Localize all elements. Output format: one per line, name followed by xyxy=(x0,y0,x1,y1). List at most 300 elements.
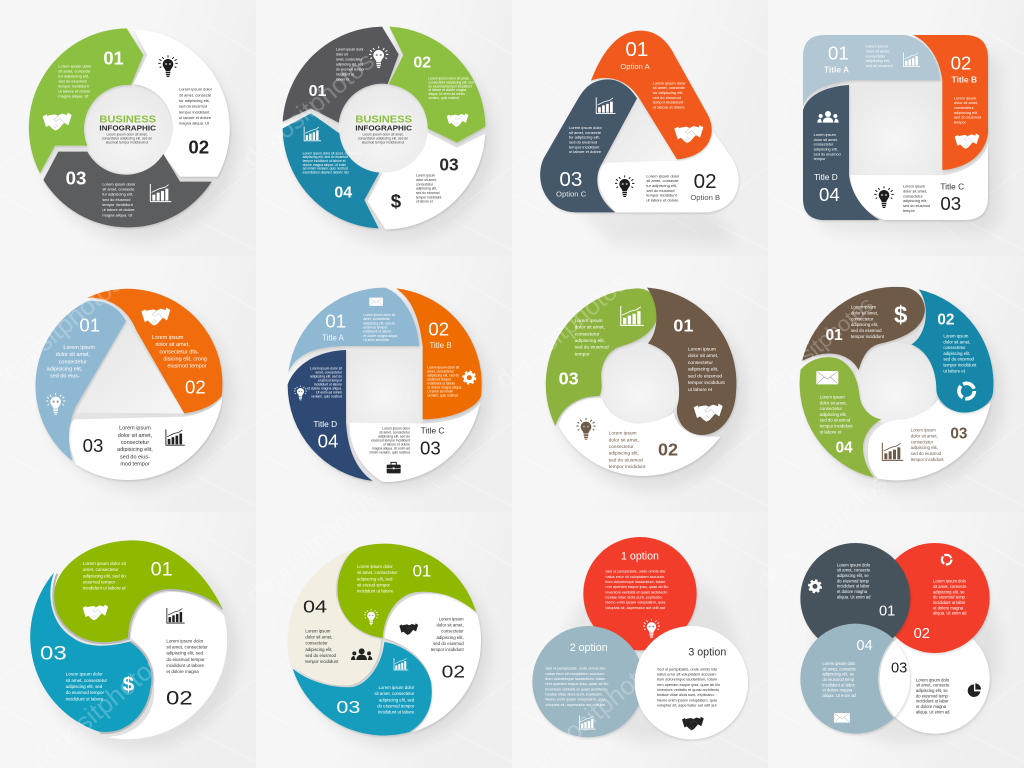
segment 02 white: adipiscing elit, xyxy=(609,451,639,457)
panel: four-part swirl circle xyxy=(288,544,490,746)
segment 01 dark grey: incididunt ut xyxy=(336,73,354,77)
segment 03 white: Lorem ipsum xyxy=(119,426,151,432)
segment 03 green: Lorem ipsum xyxy=(575,318,603,324)
segment title B orange: et dolore magna aliqua. xyxy=(427,386,462,390)
segment 02 green: veniam, quis nostrud xyxy=(428,96,459,100)
circle 3 option white: tium doloremque laudantium, totam xyxy=(657,678,717,682)
circle 04 grey blue: Lorem ipsum dolo xyxy=(822,661,856,666)
circle 03 white: et dolore magna xyxy=(916,704,947,709)
segment 02 white: do eiusmod tempor xyxy=(166,657,205,662)
segment option C dark blue: 03 xyxy=(559,168,582,191)
segment 02 white xyxy=(384,593,481,732)
segment title D dark blue: sed do eiusmod xyxy=(814,152,841,156)
segment 03 blue: $ xyxy=(123,673,135,696)
segment title D dark blue: adipiscing elit, xyxy=(814,147,838,151)
segment 02 blue: tempor incididunt xyxy=(943,362,977,367)
segment title C white: eiusmod tempor incididunt xyxy=(371,438,410,442)
circle 03 white: adipiscing elit, se xyxy=(916,688,948,693)
segment 03 grey: sed do eiusmod xyxy=(102,197,130,202)
circle 04 grey blue: incididunt ut labor xyxy=(822,682,856,687)
segment 02 blue: adipiscing elit, xyxy=(943,351,971,356)
circle 1 option red: tium doloremque laudantium, totam xyxy=(605,580,665,584)
watermark text overlay: depositphotos xyxy=(240,483,383,610)
segment 02 white: Lorem ipsum dolor xyxy=(179,87,213,92)
segment title D dark blue: Lorem ipsum xyxy=(814,133,836,137)
centre title: BUSINESS xyxy=(355,115,413,126)
segment 01 brown: sed do eiusmod xyxy=(851,328,882,333)
circle 01 dark grey: sit amet, consecte xyxy=(837,568,871,573)
segment 04 green: 04 xyxy=(836,440,853,457)
segment title C white xyxy=(850,143,988,220)
segment title B orange xyxy=(913,35,988,170)
segment 04 cream: dolor sit amet, xyxy=(305,634,333,639)
circle 01 dark grey: 01 xyxy=(879,603,895,619)
circle 3 option white: 3 option xyxy=(688,647,726,659)
circle 03 white: Lorem ipsum dolo xyxy=(916,677,950,682)
segment 01 dark grey: labore et xyxy=(336,78,349,82)
segment 01 green: 01 xyxy=(151,559,173,580)
segment title B orange: adipiscing elit, sed do xyxy=(427,374,459,378)
circle 1 option red: Nemo enim ipsam voluptatem, quia xyxy=(605,601,666,605)
segment title D dark blue: Title D xyxy=(814,172,838,182)
segment 04 green: dolor sit amet, xyxy=(820,400,847,405)
segment option C dark blue: tempor incididunt xyxy=(569,144,600,149)
segment 02 white: sed do eiusmod xyxy=(179,104,207,109)
segment title B orange: 02 xyxy=(428,318,449,339)
circle 3 option white: natus error sit voluptatem accusan- xyxy=(657,672,718,676)
segment 02 white: 02 xyxy=(166,689,193,710)
segment 03 white: sed do eiusmod xyxy=(416,191,440,195)
segment 03 green: 03 xyxy=(559,368,579,388)
segment 02 white: dolor sit amet, xyxy=(436,622,464,627)
circle 02 red: aliqua. Ut enim ad xyxy=(933,611,967,616)
circle 1 option red: natus error sit voluptatem accusan- xyxy=(605,575,666,579)
segment 02 green: aliqua. Ut enim ad minim xyxy=(428,92,465,96)
centre title: consectetur adipiscing elit, sed do xyxy=(358,136,408,140)
segment option A orange: sed do eiusmod xyxy=(653,95,681,100)
segment option C dark blue: sit amet, consecte xyxy=(569,130,602,135)
segment 02 white: sit amet, consectetur xyxy=(166,644,208,649)
segment title A light blue: Lorem ipsum xyxy=(866,45,888,49)
segment 01 green: incididunt ut labore et xyxy=(83,586,126,591)
segment title B orange xyxy=(396,288,482,419)
centre title: BUSINESS xyxy=(99,115,157,126)
segment title A light blue: Ut enim ad minim xyxy=(363,338,389,342)
segment option B white: 02 xyxy=(694,170,717,193)
segment 01 brown xyxy=(647,288,736,435)
circle 03 white xyxy=(880,624,990,734)
segment 02 white: Lorem ipsum xyxy=(439,616,464,621)
segment 02 white: consectetur xyxy=(609,444,634,450)
segment option A orange: 01 xyxy=(625,38,648,61)
segment title D navy: veniam, quis nostrud xyxy=(311,394,342,398)
segment option B white: tempor incididunt xyxy=(646,193,678,198)
circle 04 grey blue: adipiscing elit, se xyxy=(822,672,855,677)
segment 01 green xyxy=(337,544,476,638)
segment 04 green: sed do eiusmod xyxy=(820,418,851,423)
segment 02 white: adipiscing elit, xyxy=(436,635,464,640)
segment 02 white: ut labore et dolore xyxy=(179,115,212,120)
segment 02 white: sed do eiusmod xyxy=(609,457,643,463)
segment 03 white: adipisicing elit, xyxy=(117,447,153,453)
circle 04 grey blue: sit amet, consecte xyxy=(822,666,857,671)
segment title C white: dolor sit amet, xyxy=(903,189,927,193)
segment 01 dark grey: Lorem ipsum dolor xyxy=(336,48,364,52)
segment 03 blue: adipiscing elit, sed xyxy=(379,697,415,702)
segment title D navy: 04 xyxy=(318,431,338,452)
segment 02 white: 02 xyxy=(188,136,209,157)
segment 03 white xyxy=(69,396,223,480)
segment 01 brown: Lorem ipsum xyxy=(688,346,716,352)
segment title D navy: Lorem ipsum dolor sit xyxy=(310,366,342,370)
segment 03 green: tempor xyxy=(575,351,590,357)
segment 03 green: sed do eiusmod xyxy=(575,345,609,351)
segment 03 white: dolor sit amet, xyxy=(118,433,153,439)
segment title D dark blue: tempor xyxy=(814,157,826,161)
circle 01 dark grey: et dolore magna xyxy=(837,589,868,594)
segment title A light blue: eiusmod tempor xyxy=(363,325,388,329)
segment 01 brown xyxy=(802,287,925,370)
centre title: eiusmod tempor incididunt ut xyxy=(106,140,148,144)
segment 01 dark grey: 01 xyxy=(309,83,327,100)
circle 01 dark grey: adipiscing elit, se xyxy=(837,573,869,578)
segment 02 white: incididunt ut labore xyxy=(166,663,204,668)
segment 01 green: ut labore et dolore xyxy=(58,89,91,94)
segment title D navy: amet, consectetur xyxy=(316,370,343,374)
segment 02 green: consectetur adipiscing elit, sed xyxy=(428,80,474,84)
circle 1 option red xyxy=(583,537,697,650)
segment 01 green: eiusmod tempor xyxy=(83,579,116,584)
circle 01 dark grey: aliqua. Ut enim ad xyxy=(837,594,871,599)
segment 02 white: 02 xyxy=(442,662,465,682)
segment 03 white: consectetur xyxy=(416,182,434,186)
segment 01 light blue: dolor sit amet, xyxy=(56,352,91,358)
segment 04 cream: consectetur xyxy=(305,641,328,646)
segment 02 white: Lorem ipsum xyxy=(609,431,637,437)
segment title A light blue: adipiscing elit, sed do xyxy=(363,321,395,325)
segment 02 orange: Lorem ipsum xyxy=(152,335,184,341)
segment 02 white: tempor incididunt xyxy=(609,464,646,470)
circle 2 option grey blue: voluptas sit, aspernatur aut odit aut xyxy=(545,703,606,707)
segment 04 cream: Lorem ipsum xyxy=(305,628,331,633)
segment 03 white: 03 xyxy=(950,425,967,442)
segment 02 white xyxy=(107,592,227,739)
segment 01 dark grey: amet, consectetur xyxy=(336,58,363,62)
panel: circle with square hole and four titles xyxy=(288,288,491,491)
circle 01 dark grey: Lorem ipsum dolo xyxy=(837,562,871,567)
circle 03 white: incididunt ut labor xyxy=(916,699,949,704)
segment option C dark blue: ut labore et dolore xyxy=(569,149,602,154)
segment title A light blue: adipiscing elit, xyxy=(866,59,890,63)
panel: three-part swirl circle xyxy=(30,540,238,750)
segment option C dark blue: sed do eiusmod xyxy=(569,139,597,144)
segment 02 white: tur adipiscing elit, xyxy=(179,98,210,103)
centre title: Lorem ipsum dolor sit amet, xyxy=(106,133,148,137)
segment 02 orange: consectetur dfa- xyxy=(159,349,199,355)
segment option A orange: sit amet, consecte xyxy=(653,85,686,90)
segment 03 blue: sit amet, consectetur xyxy=(66,678,108,683)
segment 03 blue: Lorem ipsum dolor xyxy=(66,672,103,677)
circle 3 option white: Sed ut perspiciatis, unde omnis iste xyxy=(657,667,717,671)
circle 04 grey blue xyxy=(800,624,910,734)
segment title B orange: tempor xyxy=(954,120,967,124)
segment option A orange: ut labore et dolore xyxy=(653,104,686,109)
panel: rounded triangle with three options xyxy=(540,31,739,243)
segment 04 cream: tempor incididunt xyxy=(305,659,339,664)
segment 02 blue: dolor sit amet, xyxy=(943,339,971,344)
segment 02 orange: 02 xyxy=(185,376,206,397)
segment title C white: adipiscing elit, sed do xyxy=(378,434,410,438)
segment 02 blue: sed do eiusmod xyxy=(943,357,974,362)
segment 01 green: sit amet, consecte xyxy=(58,69,91,74)
segment title D dark blue xyxy=(803,85,880,220)
segment 03 white: sed do eiusmod xyxy=(911,451,942,456)
segment option C dark blue: tur adipiscing elit, xyxy=(569,135,600,140)
segment 01 dark grey: dolor sit xyxy=(336,53,348,57)
segment 03 blue: do eiusmod tempor xyxy=(377,703,415,708)
circle 04 grey blue: et dolore magna xyxy=(822,688,853,693)
circle 04 grey blue: aliqua. Ut enim ad xyxy=(822,693,857,698)
segment 03 grey: sit amet, consecte xyxy=(102,186,135,191)
segment 03 green: consectetur xyxy=(575,331,600,337)
segment 04 cream: adipiscing elit, xyxy=(305,647,333,652)
segment 01 brown: ut labore et xyxy=(688,387,713,393)
segment title D navy: adipiscing elit, sed do xyxy=(310,374,342,378)
watermark text overlay: depositphotos xyxy=(237,46,380,173)
segment 03 white: adipiscing elit, xyxy=(416,187,437,191)
segment title A light blue: Lorem ipsum dolor sit xyxy=(363,313,395,317)
segment 01 green: 01 xyxy=(413,562,431,581)
centre title xyxy=(99,115,157,144)
circle 04 grey blue: 04 xyxy=(856,638,873,654)
segment 01 brown: dolor sit amet, xyxy=(688,353,718,359)
segment title C white: Title C xyxy=(940,181,964,191)
segment option B white: tur adipiscing elit, xyxy=(646,183,677,188)
segment 02 white: Lorem ipsum dolor xyxy=(166,638,204,643)
watermark text overlay: depositphotos xyxy=(490,268,633,395)
segment title D dark blue: 04 xyxy=(819,184,840,205)
panel: three curved segments ring brown green xyxy=(546,288,746,490)
centre title: Lorem ipsum dolor sit amet, xyxy=(362,133,404,137)
segment 03 green: dolor sit amet, xyxy=(575,325,605,331)
circle 2 option grey blue: rem aperiam eaque ipsa, quae ab illo xyxy=(545,682,608,686)
white overlap over grey blue with number 03 xyxy=(880,641,910,717)
segment 01 green: adipiscing elit, sed xyxy=(357,576,393,581)
segment 04 cream xyxy=(288,549,381,686)
segment 01 green: 01 xyxy=(103,47,124,68)
segment 04 cream: sed do eiusmod xyxy=(305,653,336,658)
segment 01 green: tur adipiscing elit, xyxy=(58,74,89,79)
segment 01 brown: consectetur xyxy=(851,316,874,321)
segment title C white xyxy=(349,403,480,482)
panel: three overlapping circles xyxy=(532,537,748,742)
segment 04 green: ut labore et xyxy=(820,429,842,434)
circle 3 option white: inventore veritatis et quasi architecto xyxy=(657,688,719,692)
segment option C dark blue xyxy=(540,79,637,212)
segment 02 blue: 02 xyxy=(937,312,954,329)
segment title D navy: Title D xyxy=(313,419,337,429)
segment 03 blue: incididunt ut labore xyxy=(378,710,415,715)
segment 04 cream: 04 xyxy=(303,597,327,617)
segment title B orange: Title B xyxy=(952,75,977,85)
segment 03 white: 03 xyxy=(83,435,103,456)
segment title B orange: Title B xyxy=(429,341,452,350)
centre title: INFOGRAPHIC xyxy=(355,125,412,132)
segment 04 blue xyxy=(283,113,379,228)
segment option B white: sit amet, consecte xyxy=(646,178,679,183)
segment title B orange: 02 xyxy=(951,52,971,73)
circle 04 grey blue: do eiusmod temp xyxy=(822,677,855,682)
segment 04 blue: exercitation ullamco laboris nisi xyxy=(303,170,349,174)
segment 04 green xyxy=(800,357,881,478)
segment 02 orange xyxy=(87,289,222,413)
circle 02 red: et dolore magna xyxy=(933,605,964,610)
segment title B orange: Lorem ipsum xyxy=(954,96,976,100)
segment 02 orange: disicing elit, crong xyxy=(163,356,207,362)
segment title A light blue xyxy=(288,288,419,373)
segment title A light blue: Title A xyxy=(322,334,345,343)
segment 02 white: et dolore magna xyxy=(166,669,199,674)
segment 01 green xyxy=(29,28,143,173)
segment 04 blue: Lorem ipsum dolor sit amet, consectetur xyxy=(303,151,363,155)
segment 03 white: ut labore et xyxy=(416,200,433,204)
segment 03 grey: Lorem ipsum dolor xyxy=(102,181,136,186)
watermark text overlay: depositphotos xyxy=(750,468,893,595)
segment 01 brown: sed do eiusmod xyxy=(688,373,722,379)
circle 01 dark grey: incididunt ut labor xyxy=(837,584,870,589)
segment 02 blue: consectetur xyxy=(943,345,966,350)
segment 03 white: dolor sit amet, xyxy=(416,178,437,182)
segment 03 blue: sit amet, consectetur xyxy=(374,691,415,696)
segment 01 green: tempor incididunt xyxy=(58,84,90,89)
segment 02 blue: Lorem ipsum xyxy=(943,334,969,339)
centre title: consectetur adipiscing elit, sed do xyxy=(102,136,152,140)
segment title C white: 03 xyxy=(420,437,441,458)
segment title C white: magna aliqua. Ut enim ad xyxy=(372,446,410,450)
segment title C white: tempor xyxy=(903,209,916,213)
segment 01 brown: adipiscing elit, xyxy=(688,367,718,373)
segment 02 green xyxy=(389,27,485,143)
segment 03 white: tempor incididunt xyxy=(911,457,944,462)
segment 04 green: adipiscing elit, xyxy=(820,412,847,417)
segment 01 light blue: adipisicing elit, xyxy=(47,366,83,372)
circle 02 red: do eiusmod temp xyxy=(933,595,966,600)
segment 04 blue: 04 xyxy=(334,184,352,201)
segment 03 white: Lorem ipsum xyxy=(911,428,936,433)
centre title: eiusmod tempor incididunt ut xyxy=(362,140,404,144)
circle 03 white: aliqua. Ut enim ad xyxy=(916,709,950,714)
circle 01 dark grey: do eiusmod temp xyxy=(837,578,870,583)
segment title D dark blue: dolor sit amet, xyxy=(814,138,838,142)
segment option B white: Option B xyxy=(690,193,720,202)
segment title A light blue: incididunt ut labore xyxy=(363,330,391,334)
segment 01 green: Lorem ipsum dolor xyxy=(58,64,92,69)
segment title A light blue: dolor sit amet, xyxy=(866,49,890,53)
segment title B orange: eiusmod tempor xyxy=(427,378,452,382)
segment 03 grey: tur adipiscing elit, xyxy=(102,192,133,197)
segment 04 green: Lorem ipsum xyxy=(820,395,845,400)
segment 02 white: tempor incididunt xyxy=(179,109,210,114)
segment title B orange: incididunt ut labore xyxy=(427,382,455,386)
segment title D dark blue: consectetur xyxy=(814,143,834,147)
segment option A orange: tur adipiscing elit, xyxy=(653,90,683,95)
segment title D navy: et dolore magna aliqua. xyxy=(307,386,342,390)
segment title A light blue: consectetur xyxy=(866,54,886,58)
segment 02 green: ut labore et dolore magna xyxy=(428,88,466,92)
segment 01 green: adipiscing elit, sed do xyxy=(83,573,126,578)
panel: four overlapping circles xyxy=(800,543,1000,744)
segment 01 green: sed do eiusmod xyxy=(58,79,86,84)
segment 04 green: consectetur xyxy=(820,406,843,411)
segment 03 white: consectetur xyxy=(911,439,934,444)
segment 01 brown: consectetur xyxy=(688,360,713,366)
segment 04 blue: ad minim veniam, quis nostrud xyxy=(303,167,348,171)
segment 03 blue: do eiusmod tempor xyxy=(66,690,105,695)
segment 03 blue: incididunt ut labore xyxy=(66,696,104,701)
segment option B white: ut labore et dolore xyxy=(646,197,679,202)
segment 01 light blue: Lorem ipsum xyxy=(63,345,95,351)
circle 03 white: sit amet, consecte xyxy=(916,683,950,688)
segment title C white: minim veniam, quis nostrud xyxy=(369,450,410,454)
segment 03 white: mod tempor xyxy=(120,461,150,467)
segment 03 white: 03 xyxy=(439,155,459,175)
circle 02 red: incididunt ut labor xyxy=(933,600,966,605)
panel: rounded square with four titles xyxy=(803,35,1001,233)
segment option A orange: Option A xyxy=(620,62,651,71)
circle 2 option grey blue: Nemo enim ipsam voluptatem, quia xyxy=(545,698,606,702)
segment 03 blue: adipiscing elit, sed xyxy=(66,684,103,689)
segment 03 blue xyxy=(30,573,152,733)
circle 3 option white: rem aperiam eaque ipsa, quae ab illo xyxy=(657,683,720,687)
segment 01 dark grey: adipiscing elit, sed xyxy=(336,63,363,67)
segment 01 green: Lorem ipsum dolor xyxy=(357,564,393,569)
segment option C dark blue: Option C xyxy=(556,190,587,199)
segment 03 green xyxy=(546,288,659,426)
segment title B orange: consectetur xyxy=(954,106,975,110)
segment 02 green: do eiusmod tempor incididunt xyxy=(428,84,472,88)
segment 04 blue: dolore magna aliqua. Ut enim xyxy=(303,163,346,167)
segment option C dark blue: Lorem ipsum dolor xyxy=(569,125,603,130)
segment 02 white xyxy=(133,29,230,177)
segment 02 white xyxy=(559,397,720,476)
circle 3 option white xyxy=(635,626,748,739)
segment 03 grey: 03 xyxy=(66,167,86,188)
segment 01 brown: Lorem ipsum xyxy=(851,305,876,310)
segment option A orange: tempor incididunt xyxy=(653,100,684,105)
circle 3 option white: voluptas sit, aspernatur aut odit aut xyxy=(657,703,718,707)
segment option B white xyxy=(598,130,739,212)
white overlap over grey blue with number 03: 03 xyxy=(891,660,907,676)
segment 01 brown: tempor incididunt xyxy=(688,380,725,386)
segment 02 white: dolor sit amet, xyxy=(609,437,639,443)
segment 03 grey: magna aliqua. Ut xyxy=(102,212,133,217)
segment title A light blue: 01 xyxy=(828,42,849,63)
segment title B orange: Ut enim ad minim xyxy=(427,390,453,394)
segment title D navy: Ut enim ad minim xyxy=(316,390,342,394)
circle 02 red xyxy=(880,543,990,653)
segment 02 orange: dolor sit amet, xyxy=(155,342,190,348)
segment 01 green: magna aliqua. Ut xyxy=(58,94,89,99)
centre title xyxy=(355,115,413,144)
segment title C white: Lorem ipsum xyxy=(903,185,925,189)
segment title A light blue: Title A xyxy=(824,65,849,75)
segment 02 white: 02 xyxy=(658,439,678,459)
segment title A light blue: 01 xyxy=(325,311,346,332)
segment 03 grey: tempor incididunt xyxy=(102,202,134,207)
circle 2 option grey blue: natus error sit voluptatem accusan- xyxy=(545,672,606,676)
circle 2 option grey blue: Sed ut perspiciatis, unde omnis iste xyxy=(545,667,606,671)
segment 02 white: sit amet, consecte xyxy=(179,92,212,97)
